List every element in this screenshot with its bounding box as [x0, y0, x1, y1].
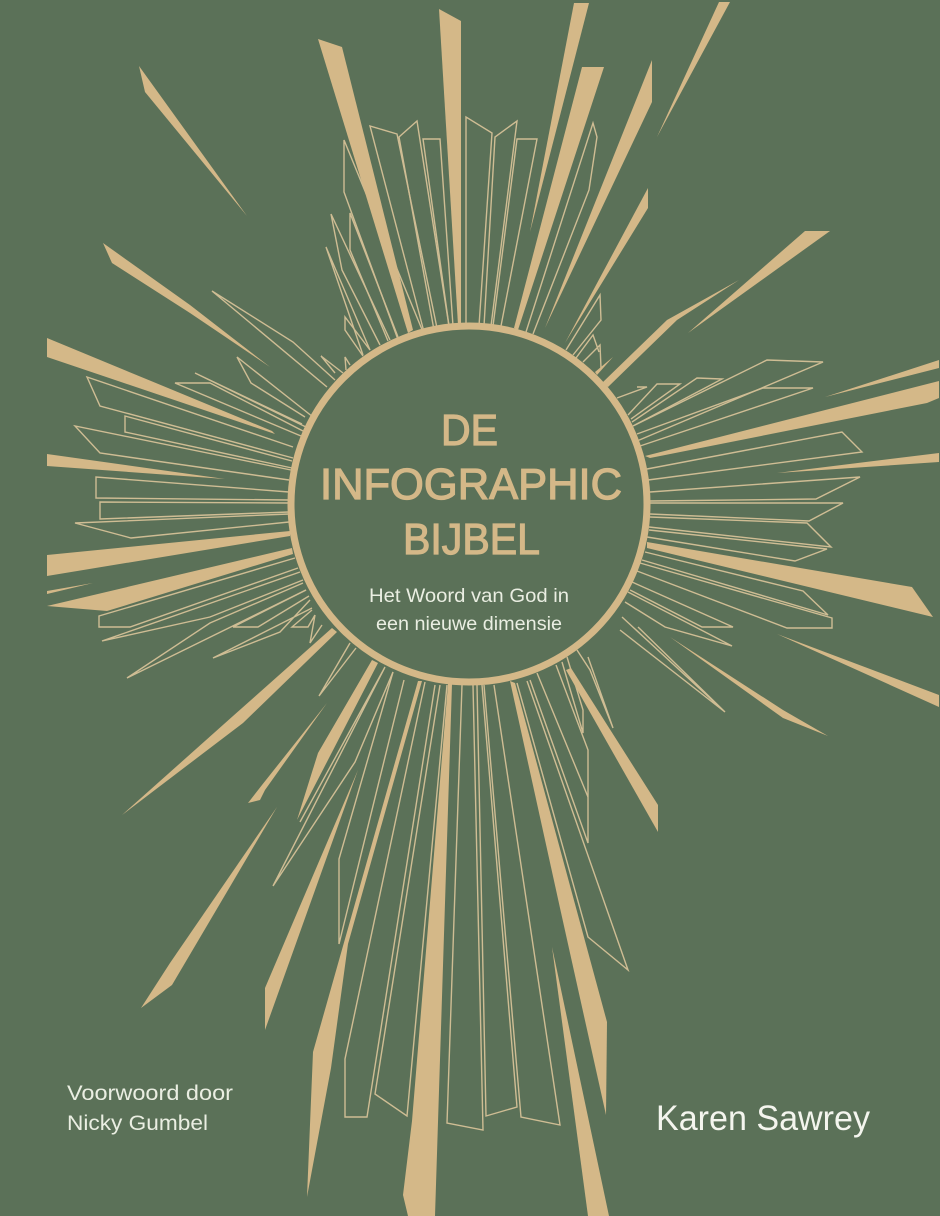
- outlined rays: top: [321, 117, 601, 373]
- solid rays: upper left: [103, 66, 270, 367]
- title: [320, 406, 622, 564]
- solid rays: left: [47, 338, 337, 815]
- title line: Infographic: INFOGRAPHIC: [320, 460, 622, 509]
- outlined rays: bottom: [273, 643, 628, 1130]
- subtitle line 2: een nieuwe dimensie: [376, 613, 562, 635]
- solid rays: bottom: [141, 660, 658, 1216]
- foreword credit: [67, 1082, 233, 1135]
- solid rays: right: [645, 360, 939, 736]
- subtitle: [369, 585, 569, 635]
- outlined rays: [75, 117, 862, 1130]
- outlined rays: lower left: [99, 558, 322, 678]
- title line: Bijbel: BIJBEL: [403, 515, 540, 564]
- outlined rays: upper right: [617, 360, 823, 446]
- subtitle line 1: Het Woord van God in: [369, 585, 569, 607]
- outlined rays: right: [647, 432, 862, 561]
- outlined rays: upper left: [75, 291, 335, 480]
- outlined rays: left: [75, 477, 289, 538]
- foreword line 2: Nicky Gumbel: [67, 1112, 208, 1135]
- solid rays: top: [318, 2, 830, 387]
- central circle: [291, 326, 647, 682]
- outlined rays: lower right: [620, 552, 832, 712]
- foreword line 1: Voorwoord door: [67, 1082, 233, 1105]
- title line: De: DE: [441, 406, 498, 455]
- author name: Karen Sawrey: [656, 1099, 870, 1138]
